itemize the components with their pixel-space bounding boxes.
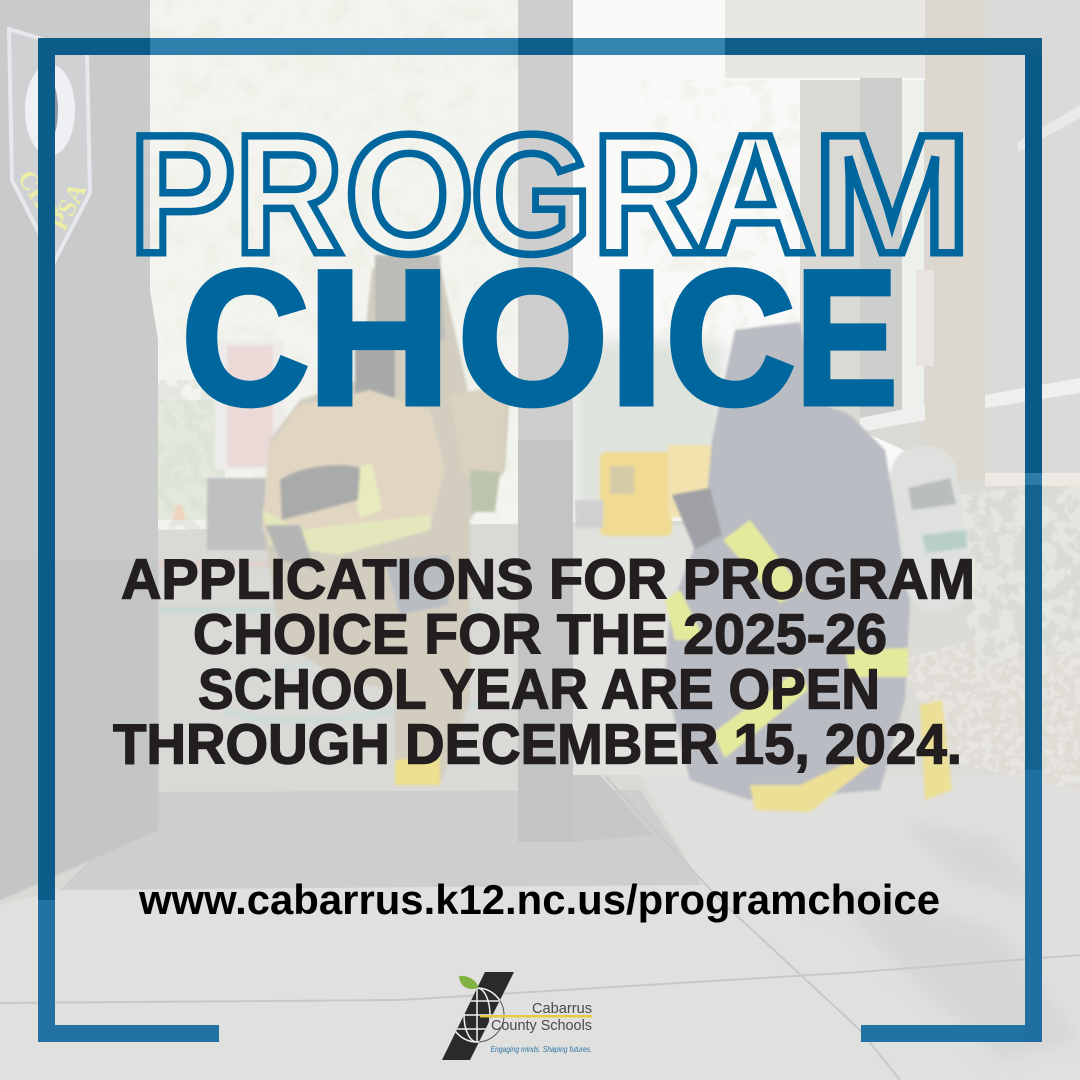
- background: window frames: [860, 78, 902, 420]
- body text: application deadline: CHOICE FOR THE 2025-26: [193, 602, 887, 666]
- background: building wall: [800, 80, 925, 460]
- body text: application deadline: APPLICATIONS FOR PROGRAM: [121, 548, 975, 612]
- background: right sidewalk: [640, 775, 1080, 1020]
- body text: application deadline: [113, 548, 975, 776]
- background: pavement wet stains: [830, 820, 1080, 1060]
- background: left firefighter: [262, 255, 510, 785]
- background: wall base: [985, 473, 1080, 486]
- background: pillar lower shade: [0, 560, 158, 900]
- logo: tagline: Engaging minds. Shaping futures.: [490, 1045, 592, 1054]
- logo: County Schools: County Schools: [491, 1018, 592, 1034]
- body text: application deadline: SCHOOL YEAR ARE OPEN: [198, 658, 880, 722]
- title: CHOICE solid: E: [796, 232, 897, 444]
- background: centre pole: [518, 0, 573, 842]
- title: PROGRAM outlined: R: [235, 100, 343, 290]
- title: CHOICE solid: H: [308, 232, 450, 444]
- background: window band: [985, 378, 1080, 408]
- background: rubber mat: [60, 790, 702, 890]
- background: bottom sidewalk: [0, 885, 1080, 1080]
- title: PROGRAM outlined: R: [593, 100, 702, 290]
- background: window sill: [860, 405, 925, 432]
- title: CHOICE solid: C: [182, 232, 309, 444]
- background: mulch bed: [900, 610, 1080, 790]
- logo: leaf: [459, 976, 478, 989]
- background: hedge: [958, 480, 1080, 660]
- background: pavement cracks: [0, 777, 1080, 1080]
- background: fire truck: [172, 340, 285, 550]
- background: right firefighter: [665, 322, 975, 812]
- background: pole lower shade: [518, 440, 573, 842]
- logo: globe outer arc: [477, 988, 504, 1042]
- title: PROGRAM outlined: P: [129, 100, 236, 290]
- background: right windows: [985, 0, 1080, 480]
- logo: yellow rule: [480, 1015, 592, 1017]
- title: PROGRAM outlined: A: [696, 100, 816, 290]
- title: PROGRAM outlined: M: [812, 100, 972, 290]
- title: PROGRAM outlined: G: [470, 100, 592, 290]
- logo: Cabarrus County Schools: [442, 972, 592, 1060]
- background: road strip: [573, 525, 733, 775]
- background: ground: [0, 520, 1080, 1080]
- logo: Cabarrus: Cabarrus: [532, 1001, 592, 1017]
- background: brick column: [925, 0, 985, 480]
- title: CHOICE solid: O: [458, 232, 608, 444]
- website url: www.cabarrus.k12.nc.us/programchoice: [138, 876, 940, 923]
- shield emblem: [9, 29, 92, 262]
- background: building roof: [725, 0, 925, 78]
- background: window glare: [1018, 105, 1080, 152]
- background: hedge foliage: [958, 480, 1080, 660]
- background: tree foliage: [150, 0, 805, 540]
- title: CHOICE solid: C: [666, 232, 795, 444]
- background: mulch texture: [900, 610, 1080, 790]
- background: pole base: [573, 775, 652, 842]
- logo: slanted bar: [442, 972, 514, 1060]
- background: dark pillar: [0, 0, 158, 900]
- background: hoses on ground: [155, 564, 500, 721]
- background: ground behind right firefighter: [730, 480, 1080, 800]
- background: sign: [916, 270, 934, 366]
- title: PROGRAM outlined: O: [345, 100, 474, 290]
- shield emblem: CHS: [12, 165, 65, 226]
- background: window glass: [902, 80, 924, 420]
- logo: globe grid: [456, 987, 500, 1043]
- shield emblem: PSA: [44, 178, 92, 235]
- title: CHOICE solid: I: [610, 232, 663, 444]
- background: school buses: [575, 445, 760, 536]
- body text: application deadline: THROUGH DECEMBER 15, 2024.: [113, 712, 962, 776]
